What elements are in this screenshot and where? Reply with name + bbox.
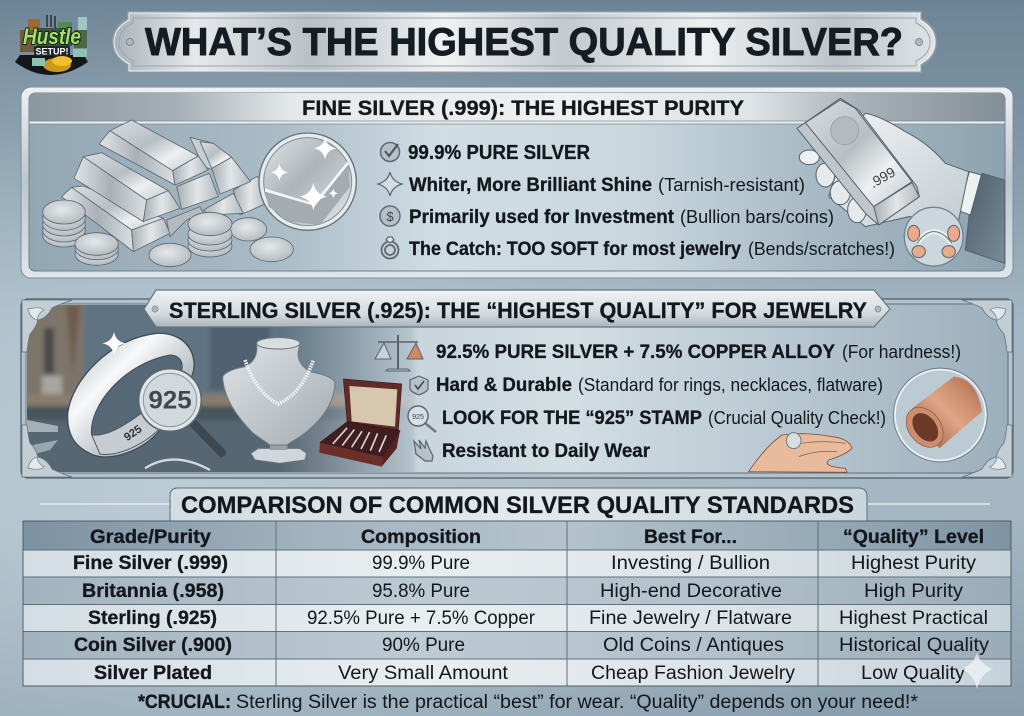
text: the catch: (Bends/scratches!) xyxy=(748,238,895,259)
table header row xyxy=(90,527,984,548)
title plaque xyxy=(112,11,937,73)
row: silver plated: Very Small Amount xyxy=(338,663,509,684)
row: coin silver: Coin Silver (.900) xyxy=(74,635,232,656)
panel body xyxy=(29,93,1005,271)
logo: Hustle Setup xyxy=(15,15,88,75)
text: investment: Primarily used for Investment xyxy=(409,206,674,228)
illustration: ring with magnifier: 925 xyxy=(122,423,144,444)
row: fine silver: Investing / Bullion xyxy=(611,553,770,574)
illustration: silver bars and coins xyxy=(43,120,293,267)
text: whiter shine xyxy=(409,174,805,196)
icon: corner sparkle xyxy=(961,653,993,689)
row: silver plated xyxy=(94,663,966,684)
row: britannia xyxy=(82,581,964,602)
text: investment xyxy=(409,206,834,228)
text: 92.5% silver: (For hardness!) xyxy=(842,341,961,362)
text: hard and durable xyxy=(436,374,883,396)
illustration: copper tube xyxy=(893,368,987,462)
row: coin silver: Historical Quality xyxy=(839,635,990,656)
table header row: Best For... xyxy=(644,527,737,548)
heading ribbon: STERLING SILVER (.925): THE “HIGHEST QUALITY” FOR JEWELRY xyxy=(169,298,867,323)
text: the catch: The Catch: TOO SOFT for most jewelry xyxy=(409,238,741,260)
panel frame xyxy=(21,87,1013,278)
text: look for the stamp: (Crucial Quality Check!) xyxy=(708,407,886,428)
text: whiter shine: (Tarnish-resistant) xyxy=(658,174,805,195)
table header row: Grade/Purity xyxy=(90,527,211,548)
illustration: ring with magnifier: 925 xyxy=(148,388,192,415)
icon: ring xyxy=(382,237,398,258)
footnote: *CRUCIAL: xyxy=(138,692,231,713)
text: 92.5% silver: 92.5% PURE SILVER + 7.5% COPPER ALLOY xyxy=(436,341,835,363)
row: sterling: Highest Practical xyxy=(839,608,988,629)
logo: Hustle Setup: SETUP! xyxy=(36,46,68,56)
row: britannia: 95.8% Pure xyxy=(372,581,470,602)
panel heading: FINE SILVER (.999): THE HIGHEST PURITY xyxy=(302,97,744,120)
header strip xyxy=(29,93,1005,121)
text: investment: (Bullion bars/coins) xyxy=(680,206,834,227)
row: coin silver xyxy=(74,635,990,656)
row: silver plated: Low Quality xyxy=(861,663,966,684)
text: 99.9% pure silver: 99.9% PURE SILVER xyxy=(408,142,591,164)
row: sterling: 92.5% Pure + 7.5% Copper xyxy=(307,608,536,629)
panel: fine silver xyxy=(21,87,1013,278)
comparison table xyxy=(23,521,1011,686)
illustration: necklace on bust xyxy=(223,338,335,463)
icon: dollar coin: $ xyxy=(386,209,394,224)
row: sterling: Sterling (.925) xyxy=(88,608,217,629)
title plaque: WHAT’S THE HIGHEST QUALITY SILVER? xyxy=(145,21,903,64)
footnote: Sterling Silver is the practical “best” for wear. “Quality” depends on your need!* xyxy=(236,692,919,713)
row: britannia: High Purity xyxy=(864,581,964,602)
text: hard and durable: (Standard for rings, necklaces, flatware) xyxy=(578,374,883,395)
comparison heading tab: COMPARISON OF COMMON SILVER QUALITY STANDARDS xyxy=(181,492,854,519)
panel: sterling silver xyxy=(10,290,1013,480)
icon: magnifier 925 xyxy=(408,406,436,432)
row: fine silver xyxy=(73,553,977,574)
illustration: ring with magnifier xyxy=(68,332,222,470)
row: sterling: Fine Jewelry / Flatware xyxy=(589,608,792,629)
row: britannia: Britannia (.958) xyxy=(82,581,224,602)
table rows background xyxy=(23,521,1011,686)
icon: shield xyxy=(410,376,428,395)
row: silver plated: Cheap Fashion Jewelry xyxy=(591,663,796,684)
icon: balance scale xyxy=(375,335,423,371)
row: sterling xyxy=(88,608,988,629)
row: coin silver: 90% Pure xyxy=(382,635,465,656)
heading ribbon xyxy=(144,290,890,327)
row: coin silver: Old Coins / Antiques xyxy=(603,635,784,656)
icon: hand xyxy=(414,440,433,461)
table header row: “Quality” Level xyxy=(843,527,984,548)
icon: check badge xyxy=(380,142,400,162)
corner ornaments xyxy=(22,300,1012,477)
text: hard and durable: Hard & Durable xyxy=(436,374,572,396)
row: britannia: High-end Decorative xyxy=(600,581,782,602)
icon: dollar coin xyxy=(380,206,400,226)
text: look for the stamp: LOOK FOR THE “925” STAMP xyxy=(442,407,702,429)
workshop backdrop xyxy=(27,305,416,472)
illustration: hand with ring xyxy=(749,433,852,472)
table header row: Composition xyxy=(361,527,481,548)
icon: four point star xyxy=(378,172,402,196)
text: daily wear: Resistant to Daily Wear xyxy=(442,440,650,462)
panel body xyxy=(26,304,1008,473)
illustration: gloved hand holding .999 bar xyxy=(797,98,1005,266)
illustration: shine disc xyxy=(259,133,356,230)
icon: magnifier 925: 925 xyxy=(412,414,424,421)
text: look for the stamp xyxy=(442,407,886,429)
text: whiter shine: Whiter, More Brilliant Shine xyxy=(409,174,652,196)
illustration: gloved hand holding .999 bar: .999 xyxy=(866,163,898,191)
row: fine silver: Highest Purity xyxy=(851,553,977,574)
logo: Hustle Setup: Hustle xyxy=(23,24,81,49)
row: silver plated: Silver Plated xyxy=(94,663,212,684)
row: fine silver: 99.9% Pure xyxy=(372,553,470,574)
row: fine silver: Fine Silver (.999) xyxy=(73,553,228,574)
comparison heading tab xyxy=(40,488,990,521)
panel frame xyxy=(21,299,1013,478)
illustration: flatware box xyxy=(319,379,402,467)
